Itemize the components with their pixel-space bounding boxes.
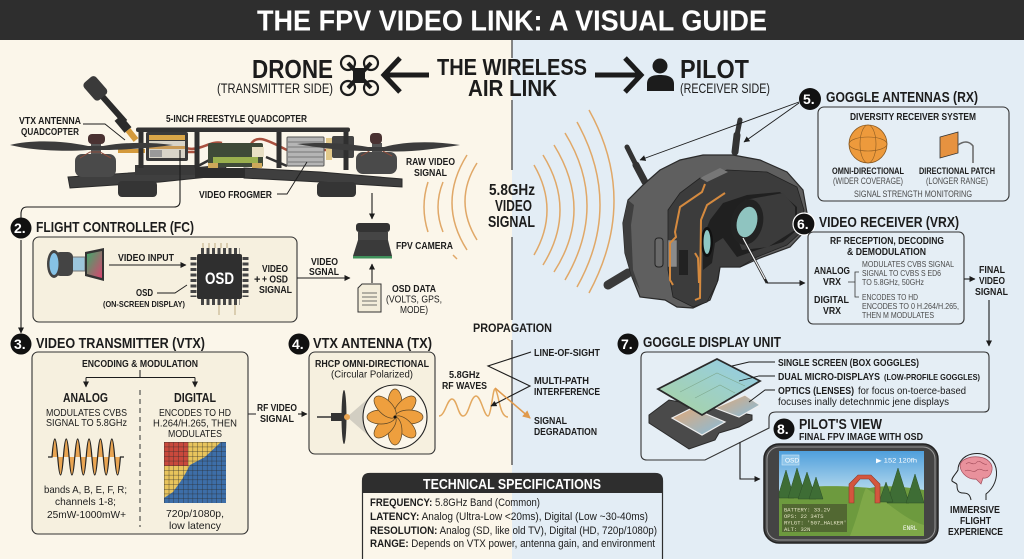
label: video plus osd signal: SIGNAL <box>259 285 292 296</box>
label: video plus osd signal: VIDEO <box>262 264 288 275</box>
arrows: goggle antennas <box>640 102 799 160</box>
osd readout: mode: ENRL <box>903 525 918 532</box>
column: analog: 25mW-1000mW+ <box>47 509 126 521</box>
step 8 heading: FINAL FPV IMAGE WITH OSD <box>799 432 923 443</box>
label: video frogmer: VIDEO FROGMER <box>199 190 273 201</box>
heading: the wireless air link: THE WIRELESS <box>437 54 587 80</box>
icon: osd chip: OSD <box>205 269 234 288</box>
panel: goggle antennas: SIGNAL STRENGTH MONITORING <box>854 189 972 199</box>
panel: video receiver: ENCODES TO HD <box>862 293 918 302</box>
label: vtx antenna: VTX ANTENNA <box>19 116 81 127</box>
text: display types: (LOW-PROFILE GOGGLES) <box>884 372 980 382</box>
icon: camera and sensor <box>47 248 104 281</box>
icon: head with brain <box>952 454 997 500</box>
label: raw video signal <box>406 157 455 179</box>
panel: video receiver: ANALOG <box>814 265 850 277</box>
osd readout: top: ▶ 152 120fh <box>876 458 917 464</box>
panel: technical specifications: FREQUENCY: 5.8GHz Band (Common) <box>370 497 540 509</box>
heading: propagation: PROPAGATION <box>473 321 552 335</box>
panel: goggle antennas: (WIDER COVERAGE) <box>833 176 903 186</box>
osd readout: top: OSD <box>785 458 799 464</box>
arrow: display to pilot's view <box>740 442 760 479</box>
label: video input: VIDEO INPUT <box>118 253 174 264</box>
step 6 badge <box>793 213 815 235</box>
text: display types <box>778 358 980 408</box>
heading: the wireless air link <box>437 54 587 101</box>
label: osd on-screen display: (ON-SCREEN DISPLAY) <box>103 299 185 309</box>
step 5 heading: GOGGLE ANTENNAS (RX) <box>826 90 978 106</box>
step 7 badge: 7. <box>621 336 633 352</box>
panel: video transmitter <box>32 352 248 534</box>
panel: video receiver: ENCODES TO 0 H.264/H.265, <box>862 302 959 311</box>
panel: goggle antennas <box>818 107 1009 201</box>
arrow: rf video signal: SIGNAL <box>260 414 294 425</box>
icon: drone <box>341 56 378 95</box>
heading: drone side: (TRANSMITTER SIDE) <box>217 80 333 96</box>
arrow: air link to pilot <box>595 58 641 92</box>
panel: video receiver <box>808 232 964 324</box>
column: digital: ENCODES TO HD <box>159 408 231 419</box>
label: vtx antenna: QUADCOPTER <box>21 127 80 138</box>
heading: encoding and modulation: ENCODING & MODULATION <box>82 359 198 370</box>
panel: goggle display unit <box>641 352 989 460</box>
label: osd data <box>386 284 442 316</box>
step 8 badge <box>774 418 794 440</box>
step 2 heading: FLIGHT CONTROLLER (FC) <box>36 219 194 236</box>
title banner <box>0 0 1024 40</box>
label: vtx antenna <box>19 116 125 140</box>
column: analog: SIGNAL TO 5.8GHz <box>46 418 127 429</box>
label: raw video signal: RAW VIDEO <box>406 157 455 168</box>
panel: video receiver: TO 5.8GHz, 50GHz <box>862 278 924 287</box>
osd readout: flight data <box>782 504 847 533</box>
arrow: rf video signal <box>248 403 307 425</box>
text: display types: OPTICS (LENSES) <box>778 386 854 397</box>
panel: technical specifications: TECHNICAL SPECIFICATIONS <box>423 476 601 493</box>
panel: technical specifications: RANGE: Depends on VTX power, antenna gain, and environment <box>370 538 655 550</box>
panel: goggle antennas: (LONGER RANGE) <box>926 176 988 186</box>
labels: propagation effects: INTERFERENCE <box>534 387 600 398</box>
label: fpv camera: FPV CAMERA <box>396 241 453 252</box>
panel: goggle antennas: OMNI-DIRECTIONAL <box>832 166 904 176</box>
step 2 badge: 2. <box>14 220 26 236</box>
panel: video receiver: VRX <box>823 305 841 317</box>
heading: encoding and modulation <box>82 359 198 387</box>
label: video plus osd signal <box>254 264 292 296</box>
panel: technical specifications: LATENCY: Analog (Ultra-Low <20ms), Digital (Low ~30-40ms) <box>370 511 648 523</box>
arrow: final video signal: FINAL <box>979 265 1005 276</box>
label: immersive flight experience: FLIGHT <box>960 516 991 527</box>
label: quadcopter: 5-INCH FREESTYLE QUADCOPTER <box>166 114 308 125</box>
labels: propagation effects: MULTI-PATH <box>534 376 589 387</box>
osd readout: flight data: RYLGT: '507_HALKER' <box>784 520 847 526</box>
arrow: air link to drone <box>384 58 429 92</box>
arrow: final video signal: VIDEO <box>979 276 1005 287</box>
panel: video receiver: SIGNAL TO CVBS S ED6 <box>862 269 941 278</box>
icon: antenna side view <box>317 390 370 444</box>
step 3 badge <box>10 334 32 354</box>
osd readout: flight data: BATTERY: 33.2V <box>784 506 831 514</box>
step 5 badge <box>799 88 821 110</box>
step 8 heading: PILOT'S VIEW <box>799 416 883 433</box>
arrow: raw video to camera <box>371 193 373 219</box>
panel: video receiver: VRX <box>823 276 841 288</box>
labels: propagation effects: DEGRADATION <box>534 427 597 438</box>
panel: video receiver: & DEMODULATION <box>847 247 926 258</box>
heading: drone side: DRONE <box>252 54 333 84</box>
labels: propagation effects: SIGNAL <box>534 416 567 427</box>
panel: goggle antennas: DIRECTIONAL PATCH <box>919 166 995 176</box>
panel: video receiver: MODULATES CVBS SIGNAL <box>862 260 954 269</box>
panel: video receiver: RF RECEPTION, DECODING <box>830 236 944 247</box>
label: osd data: OSD DATA <box>392 284 436 295</box>
heading: the wireless air link: AIR LINK <box>468 75 557 101</box>
column: digital: low latency <box>169 520 222 532</box>
label: 5.8ghz video signal: VIDEO <box>495 198 532 215</box>
heading: pilot side: (RECEIVER SIDE) <box>680 80 770 96</box>
labels: propagation effects: LINE-OF-SIGHT <box>534 348 600 359</box>
panel: technical specifications <box>362 473 663 559</box>
arrow: flight controller to vtx <box>20 240 22 333</box>
illustration: display stack <box>649 359 760 449</box>
step 7 heading: GOGGLE DISPLAY UNIT <box>643 334 781 351</box>
icon: document <box>358 284 381 312</box>
icon: forest right <box>879 468 924 503</box>
heading: drone side <box>217 54 333 96</box>
illustration: quadcopter <box>10 74 460 197</box>
label: video frogmer <box>199 162 307 201</box>
step 6 heading: VIDEO RECEIVER (VRX) <box>819 214 959 231</box>
icon: forest left <box>779 468 823 499</box>
radio waves: right <box>534 110 614 293</box>
arrow: rf video signal: RF VIDEO <box>257 403 297 414</box>
icon: race gate <box>849 475 880 503</box>
osd readout: flight data: ALT: 32N <box>784 526 810 533</box>
label: immersive flight experience: EXPERIENCE <box>948 527 1003 538</box>
label: 5.8ghz rf waves: 5.8GHz <box>449 370 480 381</box>
label: immersive flight experience <box>948 505 1003 538</box>
column: analog: channels 1-8; <box>55 496 116 508</box>
chart: rf wave <box>439 389 508 417</box>
arrow: video signal: VIDEO <box>311 257 338 268</box>
title banner: THE FPV VIDEO LINK: A VISUAL GUIDE <box>257 6 767 38</box>
column: digital <box>153 390 237 532</box>
osd readout: top <box>782 455 917 465</box>
column: digital: MODULATES <box>168 429 222 440</box>
label: osd on-screen display <box>103 285 187 309</box>
heading: pilot side: PILOT <box>680 54 749 84</box>
text: display types: DUAL MICRO-DISPLAYS <box>778 372 880 383</box>
label: 5.8ghz rf waves <box>442 370 487 392</box>
chart: digital pixel grid <box>164 442 226 503</box>
arrow: osd data to camera <box>371 264 373 283</box>
labels: propagation effects <box>534 348 600 438</box>
label: immersive flight experience: IMMERSIVE <box>950 505 1000 516</box>
label: raw video signal: SIGNAL <box>414 168 447 179</box>
step 4 badge <box>288 334 310 354</box>
step 8 heading <box>799 416 923 443</box>
panel: flight controller <box>33 237 297 322</box>
step 4 badge: 4. <box>292 336 304 352</box>
column: digital: DIGITAL <box>174 390 216 405</box>
label: 5.8ghz video signal <box>488 182 535 231</box>
label: 5.8ghz video signal: SIGNAL <box>488 214 535 231</box>
heading: pilot side <box>680 54 770 96</box>
step 8 badge: 8. <box>777 421 789 437</box>
label: video plus osd signal: + OSD <box>262 274 288 286</box>
background: receiver side <box>512 40 1024 559</box>
panel: goggle antennas: DIVERSITY RECEIVER SYSTEM <box>850 112 976 123</box>
text: display types: SINGLE SCREEN (BOX GOGGLES) <box>778 358 919 369</box>
column: digital: 720p/1080p, <box>166 508 224 520</box>
arrows: propagation paths <box>488 352 531 418</box>
icon: fpv camera <box>353 223 392 258</box>
panel: pilot's view screen <box>764 444 938 543</box>
background: transmitter side <box>0 40 512 559</box>
column: analog: bands A, B, E, F, R; <box>44 484 127 496</box>
arrow: final video signal: SIGNAL <box>975 287 1008 298</box>
panel: vtx antenna: RHCP OMNI-DIRECTIONAL <box>315 359 429 370</box>
icon: osd chip <box>194 243 246 315</box>
step 4 heading: VTX ANTENNA (TX) <box>313 335 432 352</box>
arrow: final video signal <box>964 265 1008 346</box>
arrow: video signal: SGNAL <box>309 267 339 278</box>
illustration: fpv goggles <box>608 120 807 308</box>
step 6 badge: 6. <box>797 216 809 232</box>
panel: vtx antenna: (Circular Polarized) <box>331 370 413 380</box>
column: analog: MODULATES CVBS <box>46 408 127 419</box>
panel: video receiver: THEN M MODULATES <box>862 311 934 320</box>
step 5 badge: 5. <box>803 91 815 107</box>
step 2 badge <box>10 218 32 238</box>
step 3 badge: 3. <box>14 336 26 352</box>
arrow: video signal <box>297 257 350 278</box>
chart: modulated analog wave <box>48 439 124 475</box>
icon: directional patch <box>940 132 973 163</box>
label: osd on-screen display: OSD <box>136 288 153 299</box>
step 7 badge <box>618 334 638 354</box>
label: osd data: MODE) <box>400 305 428 316</box>
panel: technical specifications: RESOLUTION: Analog (SD, like old TV), Digital (HD, 720p/1080p) <box>370 525 657 537</box>
label: 5.8ghz video signal: 5.8GHz <box>489 182 535 199</box>
label: osd data: (VOLTS, GPS, <box>386 294 442 306</box>
column: analog: ANALOG <box>63 390 108 405</box>
column: digital: H.264/H.265, THEN <box>153 418 237 430</box>
osd readout: flight data: OPS: 22 34TS <box>784 513 824 520</box>
label: 5.8ghz rf waves: RF WAVES <box>442 381 487 392</box>
step 3 heading: VIDEO TRANSMITTER (VTX) <box>36 335 205 352</box>
icon: omni sphere <box>849 125 887 163</box>
text: display types: for focus on-toerce-based <box>858 386 966 397</box>
column: analog <box>44 390 127 521</box>
arrow: vtx to flight controller <box>21 150 180 218</box>
radio waves: left <box>424 155 477 259</box>
chart: radiation pattern <box>363 385 427 449</box>
icon: pilot <box>647 58 674 91</box>
arrow: lens to video receiver <box>743 238 805 283</box>
panel: vtx antenna <box>309 352 435 454</box>
text: display types: focuses inally detechnmic jene displays <box>778 397 949 408</box>
panel: video receiver: DIGITAL <box>814 294 849 306</box>
label: video plus osd signal: + <box>254 274 260 286</box>
